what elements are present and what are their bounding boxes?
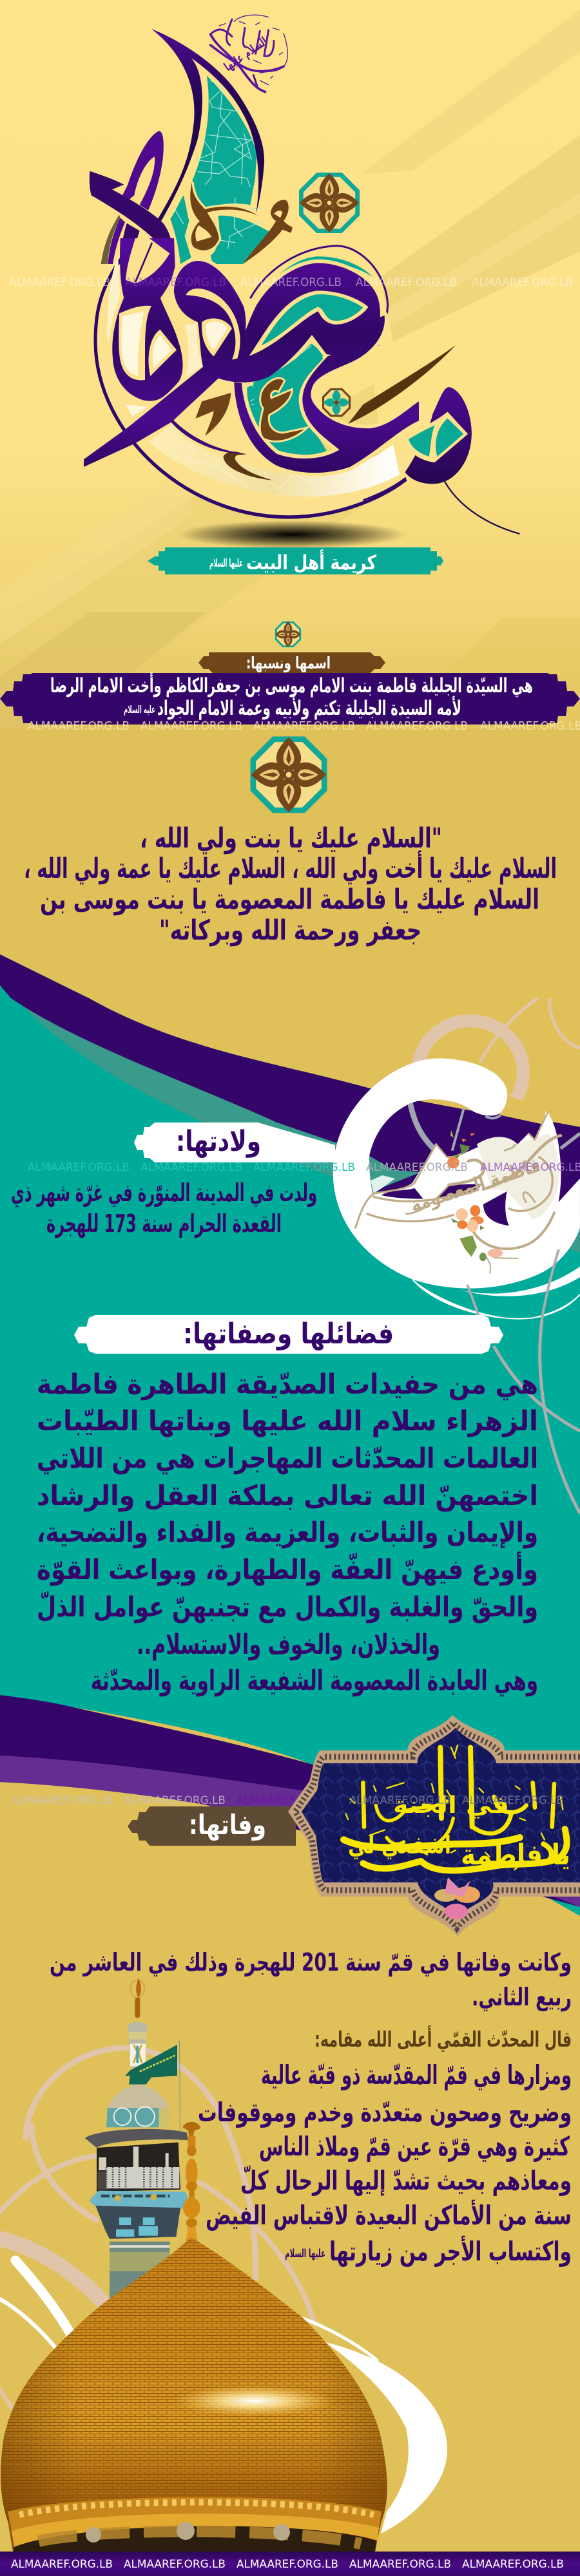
roof bbox=[85, 2129, 188, 2148]
watermark row 1: ALMAAREF.ORG.LB bbox=[9, 276, 110, 289]
tab: name and lineage heading: اسمها ونسبها: bbox=[246, 654, 331, 673]
watermark row 4: ALMAAREF.ORG.LB bbox=[124, 1794, 226, 1807]
watermark row 2 bbox=[28, 720, 580, 733]
footer bar: ALMAAREF.ORG.LB bbox=[462, 2558, 564, 2571]
watermark row 3 bbox=[28, 1161, 580, 1174]
salutation text: "السلام عليك يا بنت ولي الله ، bbox=[140, 822, 442, 855]
brown letter waw bbox=[243, 200, 293, 264]
salutation text bbox=[24, 822, 557, 947]
letter strokes bbox=[84, 238, 456, 500]
watermark row 1: ALMAAREF.ORG.LB bbox=[472, 276, 573, 289]
watermark over frame bbox=[349, 1794, 564, 1807]
teal lower panel bbox=[247, 343, 327, 455]
text: virtues: اختصهنّ الله تعالى بملكة العقل والرشاد bbox=[37, 1480, 538, 1512]
tall loop bbox=[122, 131, 164, 211]
panel: ornate frame with calligraphy: اشفعي لي bbox=[348, 1831, 451, 1859]
text: virtues: الزهراء سلام الله عليها وبناتها الطيّبات bbox=[37, 1405, 538, 1437]
salutation text: جعفر ورحمة الله وبركاته" bbox=[159, 914, 421, 947]
halos bbox=[112, 261, 419, 473]
teal redraw over halos bbox=[253, 348, 324, 450]
watermark row 1: ALMAAREF.ORG.LB bbox=[125, 276, 226, 289]
shaft bbox=[128, 2022, 148, 2067]
white ring bbox=[333, 1058, 580, 1289]
ring calligraphy name: فاطمة المعصومة bbox=[408, 1154, 543, 1217]
text: ALMAAREF.ORG.LB bbox=[237, 1794, 338, 1807]
balcony bbox=[106, 2167, 179, 2188]
watermark row 1: ALMAAREF.ORG.LB bbox=[356, 276, 457, 289]
text: virtues bbox=[37, 1368, 538, 1697]
watermark row 3: ALMAAREF.ORG.LB bbox=[366, 1161, 468, 1174]
subtitle banner: كريمة أهل البيت bbox=[246, 549, 377, 574]
white calligraphy body bbox=[365, 1112, 559, 1258]
footer bar bbox=[0, 2552, 580, 2576]
counters bbox=[202, 318, 232, 356]
artwork: white ring with calligraphy bbox=[333, 1058, 580, 1319]
text: virtues: والخذلان، والخوف والاستسلام.. bbox=[137, 1629, 440, 1661]
panel: teal section background bbox=[0, 954, 580, 1916]
ribbon: lower purple bbox=[0, 1695, 580, 1907]
small calligraphic seal: السلام عليها bbox=[222, 35, 270, 74]
gold spire of dome bbox=[182, 2122, 201, 2241]
watermark row 3: ALMAAREF.ORG.LB bbox=[480, 1161, 580, 1174]
shaft bottom bbox=[110, 2242, 169, 2306]
inscription band bbox=[13, 2526, 376, 2552]
watermark row 2: ALMAAREF.ORG.LB bbox=[28, 720, 130, 733]
arcade bbox=[97, 2143, 180, 2192]
watermark row 3: ALMAAREF.ORG.LB bbox=[140, 1161, 242, 1174]
birds and flowers bbox=[434, 1877, 480, 1919]
heading: birth: ولادتها: bbox=[176, 1125, 261, 1158]
purple forms bbox=[84, 238, 419, 473]
muqarnas bbox=[95, 2206, 180, 2239]
lower white arcs bbox=[412, 1280, 580, 1319]
dome bbox=[1, 2237, 387, 2552]
meem letter bbox=[403, 387, 519, 534]
dome highlight bbox=[174, 2385, 335, 2416]
upper crescent horn bbox=[90, 29, 293, 266]
ribbon: upper purple bbox=[0, 954, 580, 1211]
rosette: large bbox=[250, 736, 327, 813]
white band bbox=[150, 424, 400, 497]
ring opening bbox=[369, 1099, 559, 1215]
cornice bbox=[8, 2497, 382, 2531]
text: death bbox=[50, 1948, 572, 2268]
minaret bbox=[85, 1978, 201, 2306]
purple patches bbox=[382, 1184, 509, 1226]
calligraphy: main crescent artwork bbox=[84, 29, 519, 534]
yellow calligraphy bbox=[343, 1745, 567, 1871]
watermark row 2: ALMAAREF.ORG.LB bbox=[366, 720, 468, 733]
small calligraphic seal bbox=[211, 15, 287, 92]
watermark over frame: ALMAAREF.ORG.LB bbox=[349, 1794, 451, 1807]
brown marks bbox=[195, 393, 231, 436]
watermark row 1 bbox=[9, 276, 573, 289]
swoop counter bbox=[249, 291, 369, 356]
decorative curves behind dome bbox=[0, 2048, 377, 2412]
heading: virtues bbox=[74, 1315, 503, 1354]
tab: death heading bbox=[128, 1806, 296, 1846]
text: birth: ولدت في المدينة المنوّرة في غرّة شهر ذي bbox=[11, 1179, 317, 1208]
watermark row 2: ALMAAREF.ORG.LB bbox=[253, 720, 355, 733]
brown letter ain bbox=[261, 379, 304, 440]
text: virtues: هي من حفيدات الصدّيقة الطاهرة فاطمة bbox=[37, 1368, 538, 1401]
upper counter bbox=[126, 238, 169, 283]
watermark over frame: ALMAAREF.ORG.LB bbox=[462, 1794, 564, 1807]
watermark row 3: ALMAAREF.ORG.LB bbox=[253, 1161, 355, 1174]
tab: death heading: وفاتها: bbox=[189, 1809, 266, 1841]
flag bbox=[125, 2045, 177, 2085]
watermark row 1: ALMAAREF.ORG.LB bbox=[240, 276, 342, 289]
subtitle banner: عليها السلام bbox=[209, 557, 243, 570]
watermark row 2: ALMAAREF.ORG.LB bbox=[140, 720, 242, 733]
small rosette above name section bbox=[275, 621, 301, 647]
text: birth: القعدة الحرام سنة 173 للهجرة bbox=[46, 1209, 282, 1238]
flowers bbox=[447, 1130, 503, 1261]
text: death: عليها السلام bbox=[285, 2247, 325, 2260]
teal loop band bbox=[253, 256, 372, 314]
blue band bbox=[89, 2191, 188, 2209]
footer bar: ALMAAREF.ORG.LB bbox=[237, 2558, 338, 2571]
crescent outline bbox=[95, 211, 436, 517]
panel: ornate frame with calligraphy: في الجنة bbox=[393, 1792, 509, 1819]
watermark row 4: ALMAAREF.ORG.LB bbox=[11, 1794, 113, 1807]
text: birth bbox=[11, 1179, 317, 1238]
decorative rings top bbox=[322, 998, 580, 1124]
dome of minaret bbox=[106, 2085, 169, 2127]
heading: virtues: فضائلها وصفاتها: bbox=[183, 1318, 394, 1350]
sweep stroke bbox=[90, 171, 174, 266]
spire bbox=[131, 1980, 144, 1998]
shadow under crescent bbox=[177, 520, 407, 549]
gray lines below ring bbox=[467, 1249, 580, 1513]
ribbon: lower light purple bbox=[0, 1756, 580, 1907]
heading: birth bbox=[134, 1122, 335, 1162]
panel: name and lineage bbox=[0, 672, 580, 724]
brown letter heh bbox=[190, 182, 258, 251]
rosette: upper bbox=[299, 173, 360, 233]
footer bar: ALMAAREF.ORG.LB bbox=[349, 2558, 451, 2571]
panel: name and lineage: عليه السلام bbox=[124, 703, 155, 715]
footer bar: ALMAAREF.ORG.LB bbox=[11, 2558, 113, 2571]
watermark row 3: ALMAAREF.ORG.LB bbox=[28, 1161, 130, 1174]
subtitle banner bbox=[148, 547, 443, 574]
tan calligraphy strokes bbox=[356, 1112, 561, 1273]
footer bar: ALMAAREF.ORG.LB bbox=[124, 2558, 226, 2571]
ribbon: shadow bbox=[0, 985, 580, 1253]
tab: name and lineage heading bbox=[198, 652, 385, 673]
rosette: lower small bbox=[322, 388, 351, 417]
panel: ornate frame with calligraphy bbox=[288, 1715, 580, 1937]
bulb sliver bbox=[186, 289, 240, 359]
white crescent right of dome bbox=[325, 2342, 447, 2533]
watermark row 4 bbox=[11, 1794, 226, 1807]
